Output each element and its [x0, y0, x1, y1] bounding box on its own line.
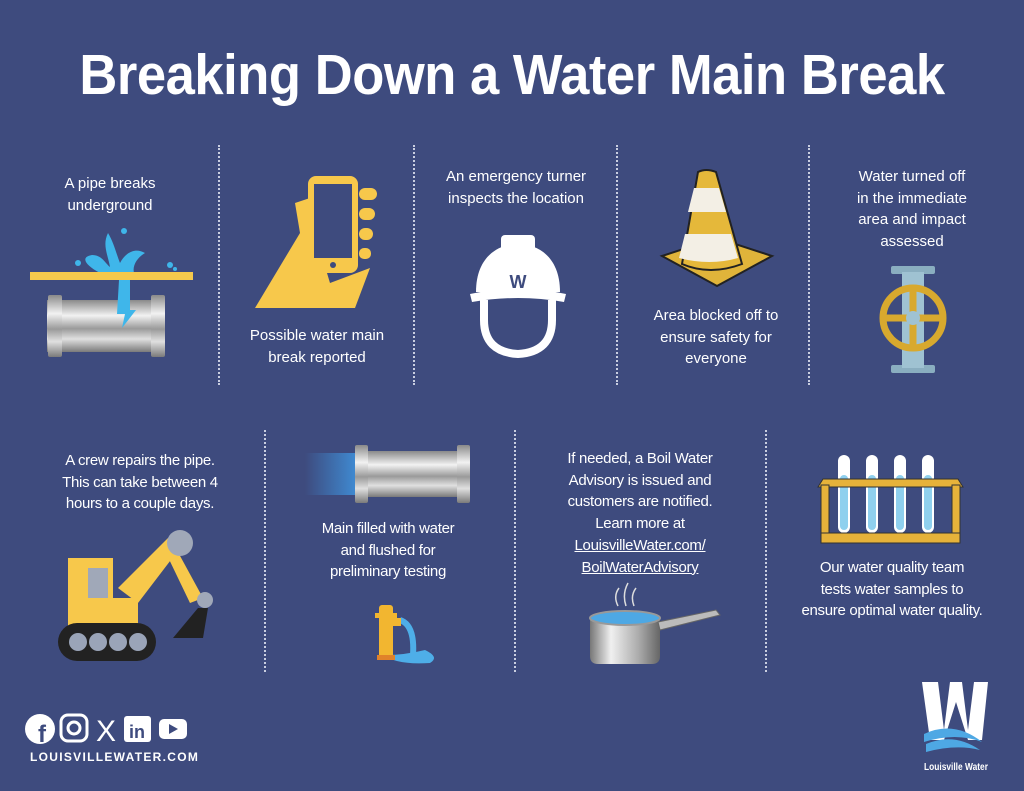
step 8 text: Learn more at [595, 515, 685, 532]
step 9 text: Our water quality team [820, 559, 964, 576]
step 4 text: ensure safety for [660, 329, 772, 346]
step 9 text: tests water samples to [821, 581, 963, 598]
title: Breaking Down a Water Main Break [79, 43, 945, 107]
step 3 text: inspects the location [448, 190, 584, 207]
step 8 text: Advisory is issued and [569, 472, 711, 489]
social icons: f [38, 721, 47, 748]
step 9 text: ensure optimal water quality. [801, 602, 983, 619]
icon: filled pipe [310, 445, 470, 503]
step 3 text [446, 168, 586, 207]
step 7 text: Main filled with water [322, 520, 454, 537]
step 7 text [322, 520, 454, 580]
step 5 text: Water turned off [859, 168, 965, 185]
logo: Louisville Water [924, 762, 988, 773]
step 2 text: break reported [268, 349, 366, 366]
social icons: in [129, 722, 145, 742]
icon: traffic cone [660, 169, 774, 287]
step 6 text: hours to a couple days. [66, 495, 214, 512]
step 9 text [801, 559, 983, 619]
logo [922, 682, 988, 773]
website url: LOUISVILLEWATER.COM [30, 750, 199, 764]
social icons: X [96, 715, 116, 748]
step 2 text: Possible water main [250, 327, 384, 344]
step 8 text [567, 450, 713, 576]
social icons [25, 714, 187, 748]
step 6 text: A crew repairs the pipe. [65, 452, 215, 469]
step 3 text: An emergency turner [446, 168, 586, 185]
step 5 text: in the immediate [857, 190, 967, 207]
step 6 text: This can take between 4 [62, 474, 218, 491]
step 5 text: assessed [880, 233, 944, 250]
icon: hard hat: W [510, 272, 526, 292]
step 7 text: preliminary testing [330, 563, 446, 580]
icon: valve [880, 266, 946, 373]
icon: excavator [58, 530, 213, 661]
step 8 text: LouisvilleWater.com/ [574, 537, 705, 554]
step 2 text [250, 327, 384, 366]
step 5 text: area and impact [858, 211, 966, 228]
step 8 text: BoilWaterAdvisory [582, 559, 698, 576]
step 8 text: If needed, a Boil Water [567, 450, 713, 467]
icon: fire hydrant [375, 605, 434, 664]
icon: hard hat [470, 235, 566, 358]
step 6 text [62, 452, 218, 512]
step 4 text: everyone [685, 350, 747, 367]
step 4 text [654, 307, 778, 367]
step 8 text: customers are notified. [568, 493, 712, 510]
icon: boiling pot [589, 582, 721, 664]
step 5 text [857, 168, 967, 250]
step 1 text [64, 175, 155, 214]
step 4 text: Area blocked off to [654, 307, 778, 324]
icon: test tubes [817, 455, 964, 544]
icon: pipe break [30, 228, 193, 357]
step 7 text: and flushed for [341, 542, 435, 559]
step 1 text: A pipe breaks [65, 175, 155, 192]
step 1 text: underground [67, 197, 153, 214]
icon: hand with phone [255, 176, 377, 308]
